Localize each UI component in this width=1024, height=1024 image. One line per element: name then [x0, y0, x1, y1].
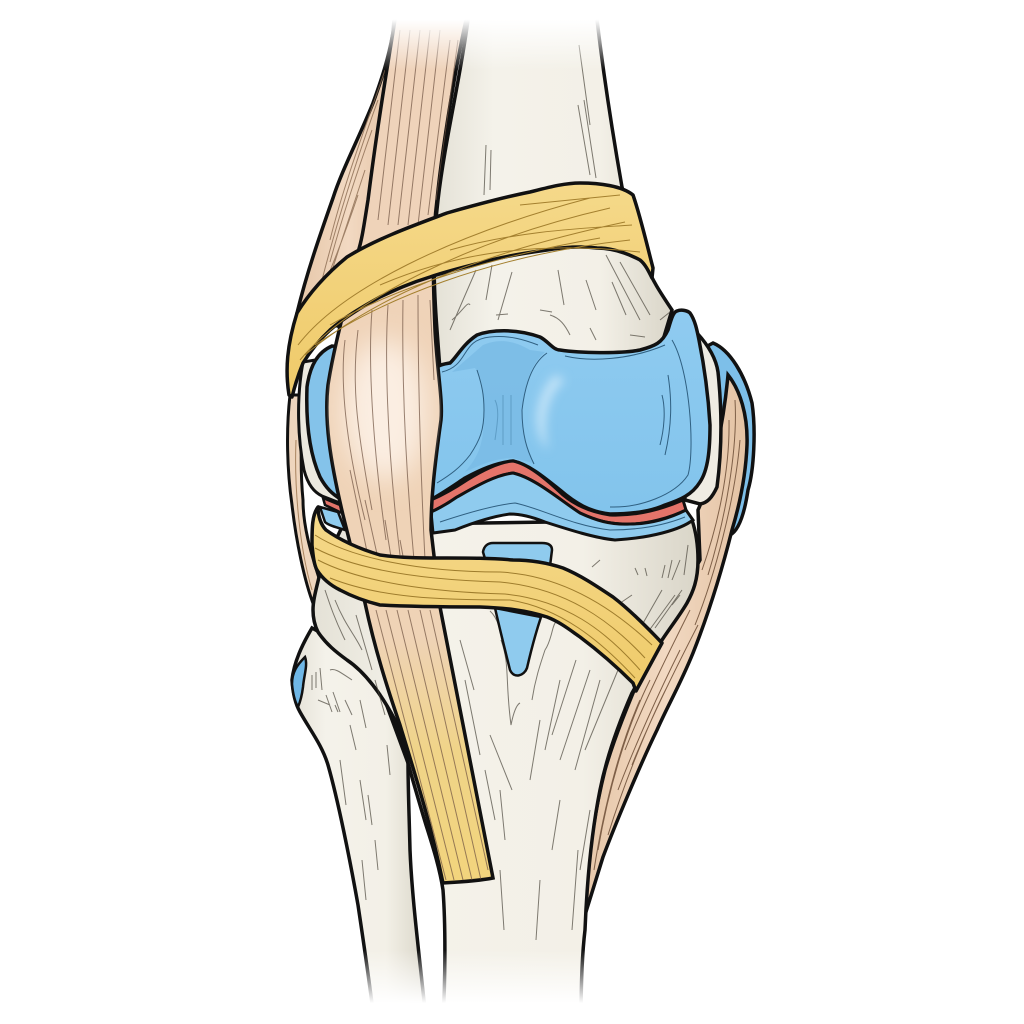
yellow strap: upper [287, 183, 653, 397]
cartilage: femoral blue [430, 310, 710, 514]
bone: left white behind cartilage [299, 355, 345, 505]
meniscus: red [431, 461, 686, 524]
yellow strap: lower [312, 507, 662, 691]
cartilage: left tibial blue [320, 507, 345, 530]
bone: white rim right [680, 333, 721, 504]
blue wedge: intercondylar lower [495, 608, 541, 676]
thin tendon: left [288, 395, 319, 606]
blue cartilage: outer right [700, 343, 754, 535]
cartilage: tibial blue [431, 473, 693, 540]
blue wedge: intercondylar upper [483, 543, 552, 566]
tendon: right side [585, 375, 747, 915]
back muscle: left hamstring [297, 0, 400, 330]
fade: bottom edge [280, 950, 680, 1024]
illustration: knee joint [285, 22, 756, 1002]
bone: fibula [292, 628, 426, 1020]
cartilage: left blue behind muscle [307, 346, 370, 500]
bone: tibia [313, 520, 698, 1020]
red meniscus left [323, 498, 342, 513]
bone: femur shaft and condyle [434, 0, 672, 370]
blue cap: fibula head [292, 657, 306, 707]
muscle: front central tendon [327, 0, 493, 883]
fade: top edge [280, 0, 680, 70]
